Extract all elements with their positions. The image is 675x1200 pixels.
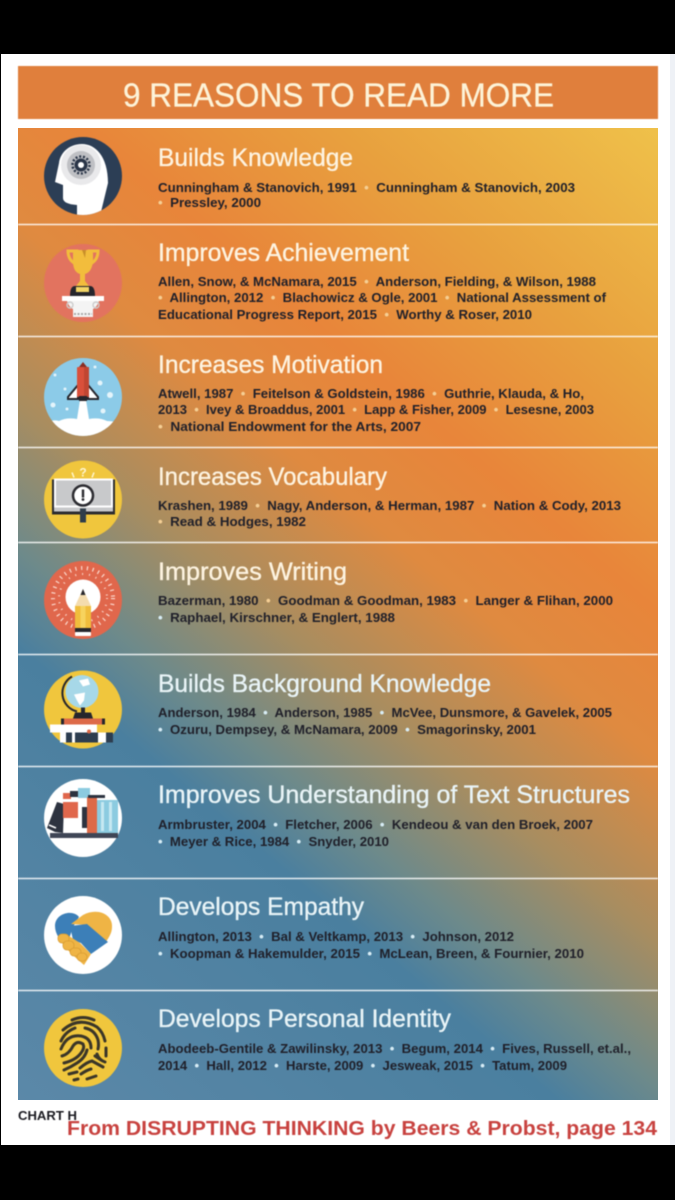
heading: Increases Motivation xyxy=(158,351,383,379)
row 9: Develops Personal Identity xyxy=(44,1005,631,1087)
row 3: Increases Motivation xyxy=(44,351,594,437)
row 7: Improves Understanding of Text Structures xyxy=(44,779,630,857)
row 2: Improves Achievement xyxy=(44,239,607,322)
citations: Cunningham & Stanovich, 1991 • Cunningham & Stanovich, 2003 xyxy=(158,180,575,195)
panel: gradient background xyxy=(18,128,658,1100)
icon: fingerprint xyxy=(44,1009,122,1087)
citations: Armbruster, 2004 • Fletcher, 2006 • Kendeou & van den Broek, 2007 xyxy=(158,817,593,832)
citations: Atwell, 1987 • Feitelson & Goldstein, 1986 • Guthrie, Klauda, & Ho, xyxy=(158,386,584,401)
citations: 2014 • Hall, 2012 • Harste, 2009 • Jesweak, 2015 • Tatum, 2009 xyxy=(158,1058,567,1073)
citations: • Read & Hodges, 1982 xyxy=(158,514,306,529)
row 1: Builds Knowledge xyxy=(44,137,575,216)
citations: Abodeeb-Gentile & Zawilinsky, 2013 • Begum, 2014 • Fives, Russell, et.al., xyxy=(158,1041,631,1056)
heading: Improves Achievement xyxy=(158,239,409,267)
citations xyxy=(158,1041,631,1073)
citations: 2013 • Ivey & Broaddus, 2001 • Lapp & Fisher, 2009 • Lesesne, 2003 xyxy=(158,402,594,417)
row 5: Improves Writing xyxy=(44,558,613,639)
citations: Allington, 2013 • Bal & Veltkamp, 2013 • Johnson, 2012 xyxy=(158,929,514,944)
icon: books on shelf xyxy=(44,779,122,857)
icon: globe on books xyxy=(44,670,122,748)
citations: • National Endowment for the Arts, 2007 xyxy=(158,419,421,434)
title banner xyxy=(18,66,658,119)
row 8: Develops Empathy xyxy=(44,893,584,974)
citations: • Ozuru, Dempsey, & McNamara, 2009 • Smagorinsky, 2001 xyxy=(158,722,537,737)
icon: book with magnifier: ? xyxy=(79,466,87,480)
icon: head with gear xyxy=(44,137,122,216)
icon: handshake heart xyxy=(44,896,122,974)
source credit: From DISRUPTING THINKING by Beers & Probst, page 134 xyxy=(67,1117,658,1140)
heading: Builds Background Knowledge xyxy=(158,670,491,698)
heading: Increases Vocabulary xyxy=(158,463,387,491)
title banner: 9 REASONS TO READ MORE xyxy=(123,78,554,114)
citations: • Pressley, 2000 xyxy=(158,195,261,210)
citations xyxy=(158,817,593,849)
chart label: CHART H xyxy=(18,1108,77,1123)
row 4: Increases Vocabulary xyxy=(44,460,621,538)
citations: Educational Progress Report, 2015 • Worthy & Roser, 2010 xyxy=(158,307,532,322)
citations: Bazerman, 1980 • Goodman & Goodman, 1983 • Langer & Flihan, 2000 xyxy=(158,593,613,608)
heading: Develops Empathy xyxy=(158,893,364,921)
citations xyxy=(158,498,621,529)
icon: book with magnifier xyxy=(44,460,122,538)
citations: Allen, Snow, & McNamara, 2015 • Anderson, Fielding, & Wilson, 1988 xyxy=(158,274,596,289)
citations xyxy=(158,274,607,322)
citations xyxy=(158,593,613,625)
icon: rocket launch xyxy=(44,358,122,437)
citations: • Raphael, Kirschner, & Englert, 1988 xyxy=(158,610,395,625)
citations xyxy=(158,705,613,737)
heading: Builds Knowledge xyxy=(158,144,353,172)
citations: Krashen, 1989 • Nagy, Anderson, & Herman, 1987 • Nation & Cody, 2013 xyxy=(158,498,621,513)
heading: Improves Writing xyxy=(158,558,347,586)
citations xyxy=(158,386,594,434)
citations: • Allington, 2012 • Blachowicz & Ogle, 2001 • National Assessment of xyxy=(158,290,607,305)
heading: Improves Understanding of Text Structures xyxy=(158,781,630,809)
citations: • Koopman & Hakemulder, 2015 • McLean, Breen, & Fournier, 2010 xyxy=(158,946,584,961)
heading: Develops Personal Identity xyxy=(158,1005,451,1033)
icon: pencil with light rays xyxy=(44,561,122,639)
icon: trophy on pedestal xyxy=(44,244,122,322)
citations: Anderson, 1984 • Anderson, 1985 • McVee, Dunsmore, & Gavelek, 2005 xyxy=(158,705,613,720)
row 6: Builds Background Knowledge xyxy=(44,670,613,748)
citations: • Meyer & Rice, 1984 • Snyder, 2010 xyxy=(158,834,389,849)
citations xyxy=(158,180,575,210)
citations xyxy=(158,929,584,961)
